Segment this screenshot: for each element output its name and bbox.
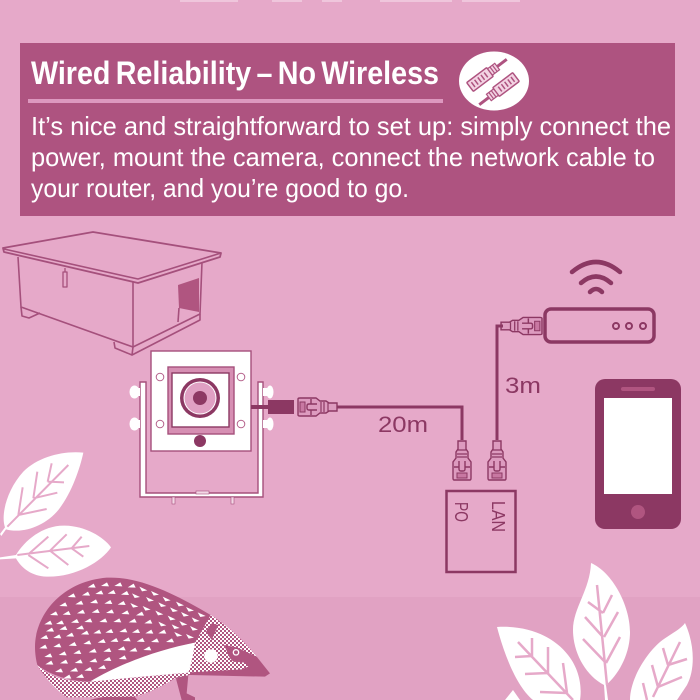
leaf: small tip [505,690,520,700]
port label: PO: PO [451,502,471,522]
port label: LAN: LAN [488,501,508,532]
smartphone [595,379,681,529]
description text: It’s nice and straightforward to set up: simply connect the [31,111,671,141]
snout [190,645,270,677]
description text: your router, and you’re good to go. [31,173,409,203]
spiny back [35,578,211,682]
camera plate [151,351,251,451]
bracket [140,382,263,497]
leaves: bottom right plant [497,563,693,700]
icon: wifi signal [572,262,620,292]
network plug: PoE port [453,441,471,480]
checkered belly and face [37,615,257,697]
leaf: left [497,627,581,700]
leaf: centre [573,563,630,700]
camera cable, 20m run [251,407,462,440]
label: 20m: 20m [378,412,428,437]
network plug: router [501,317,542,335]
heading underline [28,99,443,103]
leaves: left sprig [0,452,111,577]
hedgehog house [3,232,221,355]
leaf: right [630,623,693,700]
router cable, 3m run [497,326,503,440]
router [545,309,654,342]
legs [90,675,195,700]
camera cable socket [268,400,294,414]
heading: Wired Reliability – No Wireless [31,55,439,91]
spines [39,582,206,679]
lower background band [0,597,700,700]
camera on bracket [130,351,274,504]
mounting holes [156,373,245,428]
description text: power, mount the camera, connect the network cable to [31,142,655,172]
faint cropped heading at top [180,0,520,2]
eye [233,650,239,655]
PoE injector box [446,491,516,572]
network plug: camera side [298,398,337,416]
description text [31,111,671,203]
white side stripe [90,643,195,682]
indicator dot [194,435,206,447]
hedgehog [35,578,270,700]
ear [206,623,218,640]
lens [180,378,220,418]
cheek [204,649,218,663]
bolts [130,386,274,430]
label: 3m: 3m [505,373,541,398]
network plug: LAN port [488,441,506,480]
icon: crossed network connectors [459,52,529,110]
panel: wired reliability banner [20,43,675,216]
